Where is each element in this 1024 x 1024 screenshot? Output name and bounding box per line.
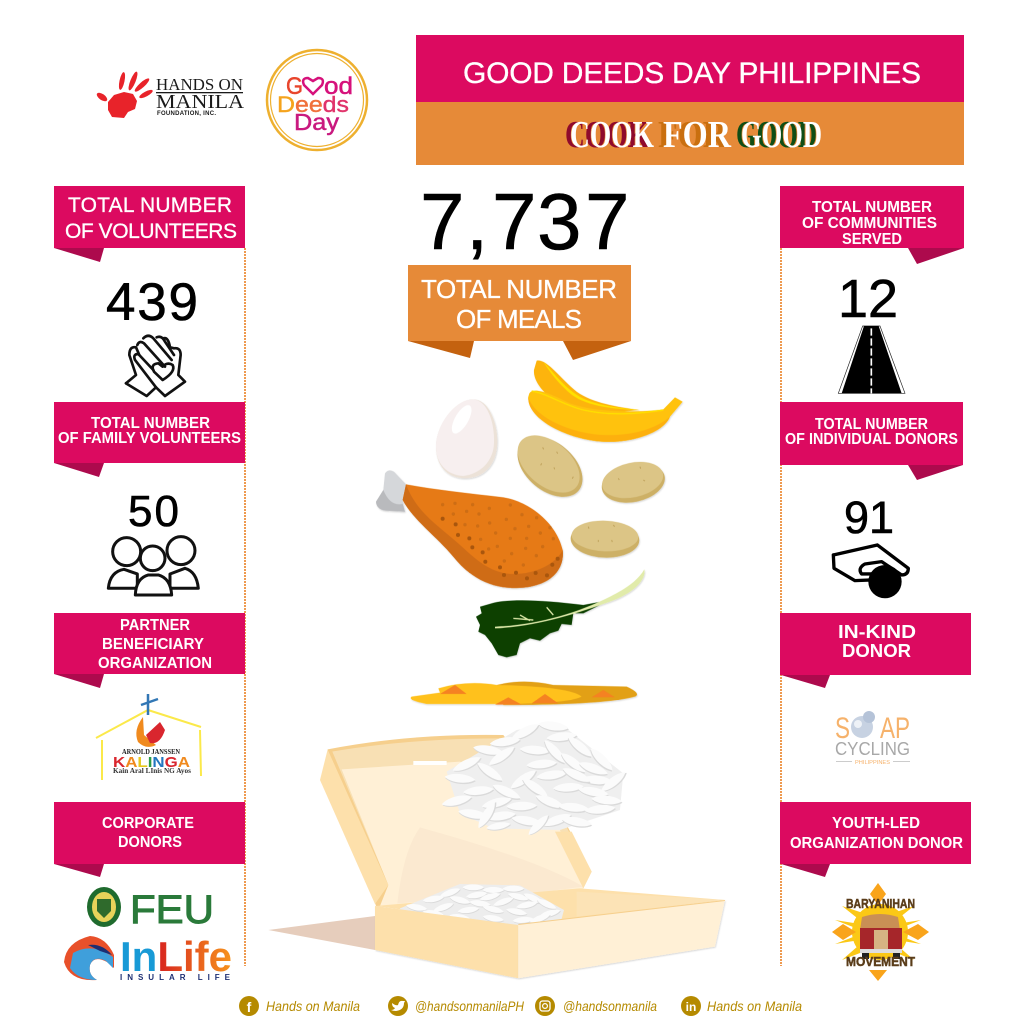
illustration: falling food ingredients (376, 360, 683, 705)
icon: heart letter o (303, 78, 323, 94)
logo: InLife Insular Life: InLife (120, 933, 232, 980)
logo: Good Deeds Day (267, 50, 367, 150)
subtitle: cook for good: COOK (570, 114, 654, 156)
panel: youth-led organization donor banner: ORGANIZATION DONOR (790, 835, 963, 852)
logo: Good Deeds Day: od (324, 73, 353, 100)
panel: individual donors banner: OF INDIVIDUAL DONORS (785, 431, 958, 448)
panel: total number of volunteers banner (54, 186, 245, 262)
icon: hands holding heart (126, 336, 185, 396)
logo: Baryanihan Movement (832, 883, 929, 981)
panel: partner beneficiary organization banner (54, 613, 245, 688)
box shadow (268, 916, 375, 950)
number: total meals 7,737: 7,737 (420, 177, 630, 266)
icon: hand dropping coin (833, 545, 908, 598)
icon: road (838, 326, 905, 393)
panel: corporate donors banner: CORPORATE (102, 815, 194, 832)
subtitle: cook for good: COOK (565, 114, 649, 156)
subtitle: cook for good: FOR (658, 114, 726, 156)
logo: Soap Cycling Philippines: PHILIPPINES (855, 760, 891, 766)
icon: red hand print (95, 71, 154, 118)
icon: dove and hand (136, 717, 156, 747)
logo: Soap Cycling Philippines: AP (880, 712, 910, 745)
panel: partner beneficiary organization banner: BENEFICIARY (102, 636, 204, 653)
icon: egg (436, 399, 497, 478)
panel: individual donors banner: TOTAL NUMBER (815, 416, 928, 433)
panel: total number of meals banner (408, 265, 631, 360)
panel: in-kind donor banner: DONOR (842, 641, 911, 661)
box lid (320, 735, 592, 907)
panel: corporate donors banner: DONORS (118, 834, 182, 851)
icon: soap bubbles (851, 716, 873, 738)
panel: total number of meals banner: OF MEALS (456, 304, 582, 334)
panel: corporate donors banner (54, 802, 245, 877)
header banner (416, 35, 964, 165)
logo: InLife Insular Life (64, 933, 232, 982)
icon: three people (108, 537, 198, 595)
logo: Soap Cycling Philippines: CYCLING (835, 739, 910, 759)
logo: Good Deeds Day: Deeds (277, 92, 349, 117)
panel: individual donors banner (780, 402, 963, 480)
panel: family volunteers banner: OF FAMILY VOLUNTEERS (58, 430, 241, 447)
icon: squash and carrot layer (411, 682, 637, 705)
logo: Arnold Janssen Kalinga: Kain Aral LInis NG Ayos (113, 767, 191, 775)
box floor (375, 888, 725, 925)
number: 439 volunteers: 439 (106, 273, 198, 332)
wordmark: MANILA (156, 91, 245, 113)
subtitle: cook for good: FOR (663, 114, 731, 156)
twitter (388, 996, 525, 1016)
icon: bananas (528, 360, 683, 442)
logo: FEU: FEU (130, 888, 214, 932)
panel: total number of volunteers banner: TOTAL NUMBER (68, 194, 232, 217)
logo: Hands on Manila (95, 71, 245, 118)
panel: family volunteers banner (54, 402, 245, 477)
panel: total number of communities served banner (780, 186, 964, 264)
panel: partner beneficiary organization banner: PARTNER (120, 617, 190, 634)
icon: leafy greens (476, 569, 645, 657)
logo: Arnold Janssen Kalinga (96, 694, 201, 780)
icon: chicken drumstick (376, 470, 563, 588)
facebook: Hands on Manila (266, 998, 360, 1014)
box front left face (375, 906, 518, 978)
column divider: left dotted line (244, 248, 246, 966)
wordmark: FOUNDATION, INC. (157, 111, 216, 117)
facebook (239, 996, 360, 1016)
wordmark (156, 75, 245, 117)
logo: FEU (87, 887, 214, 932)
logo: Good Deeds Day: Day (294, 109, 340, 135)
logo: Soap Cycling Philippines: S (835, 712, 850, 745)
panel: total number of communities served banner: OF COMMUNITIES (802, 215, 937, 232)
logo: Arnold Janssen Kalinga: KALINGA (113, 754, 190, 771)
box front right face (518, 900, 725, 978)
logo: InLife Insular Life: INSULAR LIFE (120, 973, 231, 982)
panel: family volunteers banner: TOTAL NUMBER (91, 415, 210, 432)
number: 12 communities: 12 (838, 269, 898, 329)
panel: total number of communities served banner: SERVED (842, 231, 902, 248)
logo: Soap Cycling Philippines (835, 711, 910, 766)
logo: Baryanihan Movement: BARYANIHAN (846, 896, 915, 911)
subtitle: cook for good (565, 114, 822, 156)
column divider: right dotted line (780, 248, 782, 966)
panel: youth-led organization donor banner (780, 802, 971, 877)
panel: youth-led organization donor banner: YOUTH-LED (832, 815, 920, 832)
logo: Arnold Janssen Kalinga: ARNOLD JANSSEN (122, 748, 180, 756)
instagram: @handsonmanila (563, 998, 657, 1014)
twitter: @handsonmanilaPH (415, 998, 525, 1014)
number: 50 family volunteers: 50 (128, 487, 179, 536)
subtitle: cook for good: GOOD (736, 114, 817, 156)
panel: total number of communities served banner: TOTAL NUMBER (812, 199, 932, 216)
logo: Baryanihan Movement: MOVEMENT (846, 954, 915, 969)
panel: in-kind donor banner: IN-KIND (838, 622, 916, 642)
subtitle: cook for good: GOOD (741, 114, 822, 156)
icon: eagle head (64, 936, 114, 980)
instagram (535, 996, 657, 1016)
rice in box (400, 884, 564, 926)
facebook: f (247, 999, 252, 1015)
footer: social media links (239, 996, 802, 1016)
panel: total number of volunteers banner: OF VOLUNTEERS (65, 220, 237, 243)
panel: total number of meals banner: TOTAL NUMBER (421, 274, 617, 304)
logo: Good Deeds Day: G (286, 73, 303, 100)
wordmark: HANDS ON (156, 75, 243, 94)
number: 91 individual donors: 91 (844, 492, 894, 543)
panel: partner beneficiary organization banner: ORGANIZATION (98, 655, 212, 672)
linkedin: in (686, 1000, 696, 1014)
rice heap (441, 720, 629, 838)
icon: jeepney (860, 914, 902, 959)
panel: in-kind donor banner (780, 613, 971, 688)
linkedin: Hands on Manila (707, 998, 802, 1014)
icon: sun rays (835, 904, 921, 960)
icon: potatoes (506, 424, 669, 559)
linkedin (681, 996, 802, 1016)
title: GOOD DEEDS DAY PHILIPPINES (463, 57, 921, 90)
illustration: open rice box (268, 720, 725, 978)
